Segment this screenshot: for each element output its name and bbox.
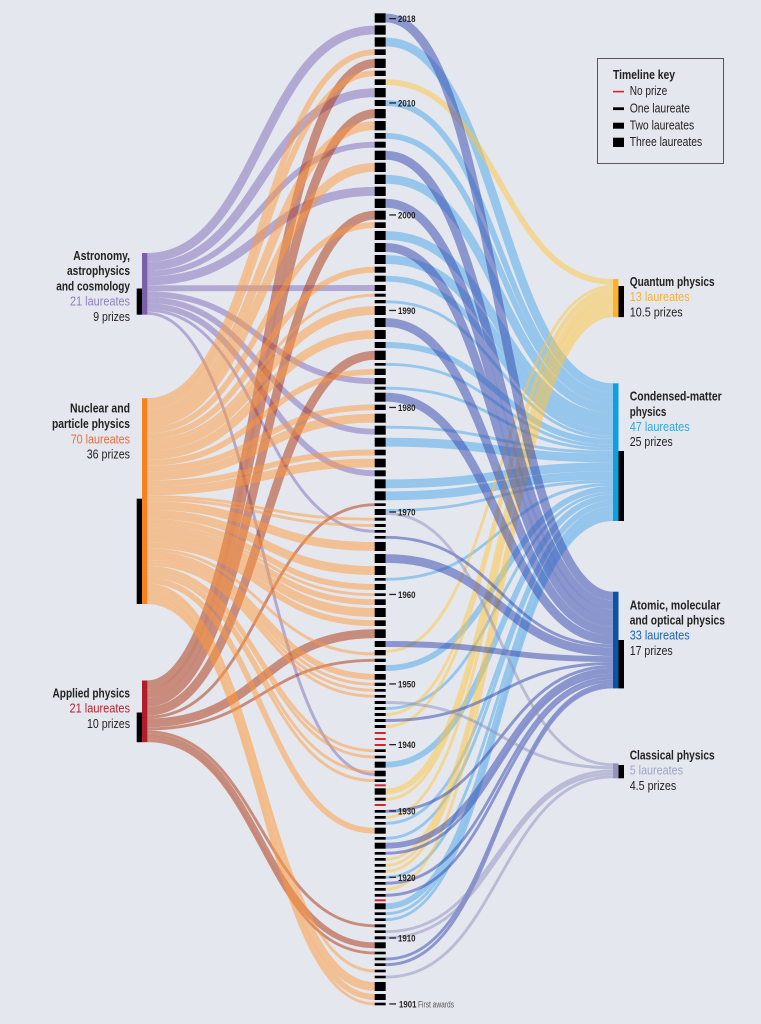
key: two laureates: Two laureates: [630, 117, 695, 132]
key: one laureate: One laureate: [630, 100, 690, 116]
panel: astronomy bar: [137, 253, 147, 315]
ribbons: timeline to condensed-matter physics: [386, 42, 613, 920]
label: condensed-matter physics: 47 laureates: [630, 419, 690, 434]
label: condensed-matter physics: physics: [630, 404, 666, 419]
label: astronomy: 21 laureates: [70, 294, 130, 309]
label: quantum physics: 13 laureates: [630, 289, 690, 304]
label: nuclear and particle physics: particle physics: [52, 416, 130, 431]
ribbons: timeline to atomic, molecular and optical physics: [386, 18, 613, 965]
timeline year labels: 1940: [398, 740, 416, 750]
timeline year labels: 1990: [398, 306, 416, 316]
label: quantum physics: 10.5 prizes: [630, 304, 683, 319]
label: atomic, molecular and optical physics: Atomic, molecular: [630, 597, 720, 612]
label: nuclear and particle physics: [52, 401, 130, 462]
label: nuclear and particle physics: 70 laureates: [71, 431, 130, 446]
label: quantum physics: [630, 274, 715, 319]
label: classical physics: [630, 747, 715, 793]
label: nuclear and particle physics: Nuclear and: [70, 401, 130, 416]
label: classical physics: 5 laureates: [630, 762, 683, 778]
label: condensed-matter physics: [630, 389, 722, 449]
ribbons: astronomy, astrophysics and cosmology to timeline: [147, 30, 375, 774]
timeline year labels: 1910: [398, 934, 416, 944]
timeline year labels: 2000: [398, 210, 416, 220]
ribbons: applied physics to timeline: [147, 63, 375, 953]
label: applied physics: 21 laureates: [70, 701, 130, 716]
timeline: prize blocks by year: [375, 13, 386, 1005]
panel: timeline key: [598, 58, 724, 164]
label: applied physics: [52, 686, 130, 731]
panel: condensed-matter bar: [613, 383, 624, 521]
label: quantum physics: Quantum physics: [630, 274, 715, 289]
panel: applied bar: [137, 680, 147, 742]
label: atomic, molecular and optical physics: and optical physics: [630, 612, 725, 628]
label: condensed-matter physics: Condensed-matter: [630, 389, 722, 404]
label: nuclear and particle physics: 36 prizes: [87, 446, 130, 462]
label: astronomy: [56, 248, 131, 324]
label: condensed-matter physics: 25 prizes: [630, 434, 673, 449]
ribbons: timeline to quantum physics: [386, 82, 613, 889]
key title: Timeline key: [613, 67, 676, 82]
ribbons: nuclear and particle physics to timeline: [147, 52, 375, 1004]
ribbons: timeline to classical physics: [386, 514, 613, 977]
timeline year labels: First awards: [418, 1000, 454, 1010]
timeline year labels: 1970: [398, 508, 416, 518]
panel: classical bar: [613, 763, 624, 778]
label: astronomy: and cosmology: [56, 278, 131, 294]
key: no prize: No prize: [630, 83, 667, 98]
panel: quantum bar: [613, 279, 624, 317]
label: applied physics: Applied physics: [52, 686, 130, 701]
timeline year labels: 2018: [398, 14, 416, 24]
timeline year labels: [389, 14, 454, 1009]
timeline year labels: 1980: [398, 403, 416, 413]
label: atomic, molecular and optical physics: 33 laureates: [630, 628, 690, 643]
label: classical physics: 4.5 prizes: [630, 778, 677, 793]
timeline year labels: 1901: [399, 1000, 416, 1010]
label: atomic, molecular and optical physics: 17 prizes: [630, 643, 673, 658]
label: applied physics: 10 prizes: [87, 716, 130, 731]
timeline year labels: 2010: [398, 98, 416, 108]
label: atomic, molecular and optical physics: [630, 597, 725, 658]
timeline year labels: 1930: [398, 806, 416, 816]
timeline year labels: 1960: [398, 590, 416, 600]
timeline: no-prize years: [375, 732, 386, 901]
label: astronomy: 9 prizes: [93, 309, 130, 324]
key: three laureates: Three laureates: [630, 134, 703, 149]
label: astronomy: Astronomy,: [73, 248, 130, 263]
label: astronomy: astrophysics: [67, 263, 130, 278]
label: classical physics: Classical physics: [630, 747, 715, 762]
panel: atomic bar: [613, 592, 624, 688]
panel: nuclear bar: [137, 398, 147, 604]
timeline year labels: 1950: [398, 680, 416, 690]
timeline year labels: 1920: [398, 873, 416, 883]
